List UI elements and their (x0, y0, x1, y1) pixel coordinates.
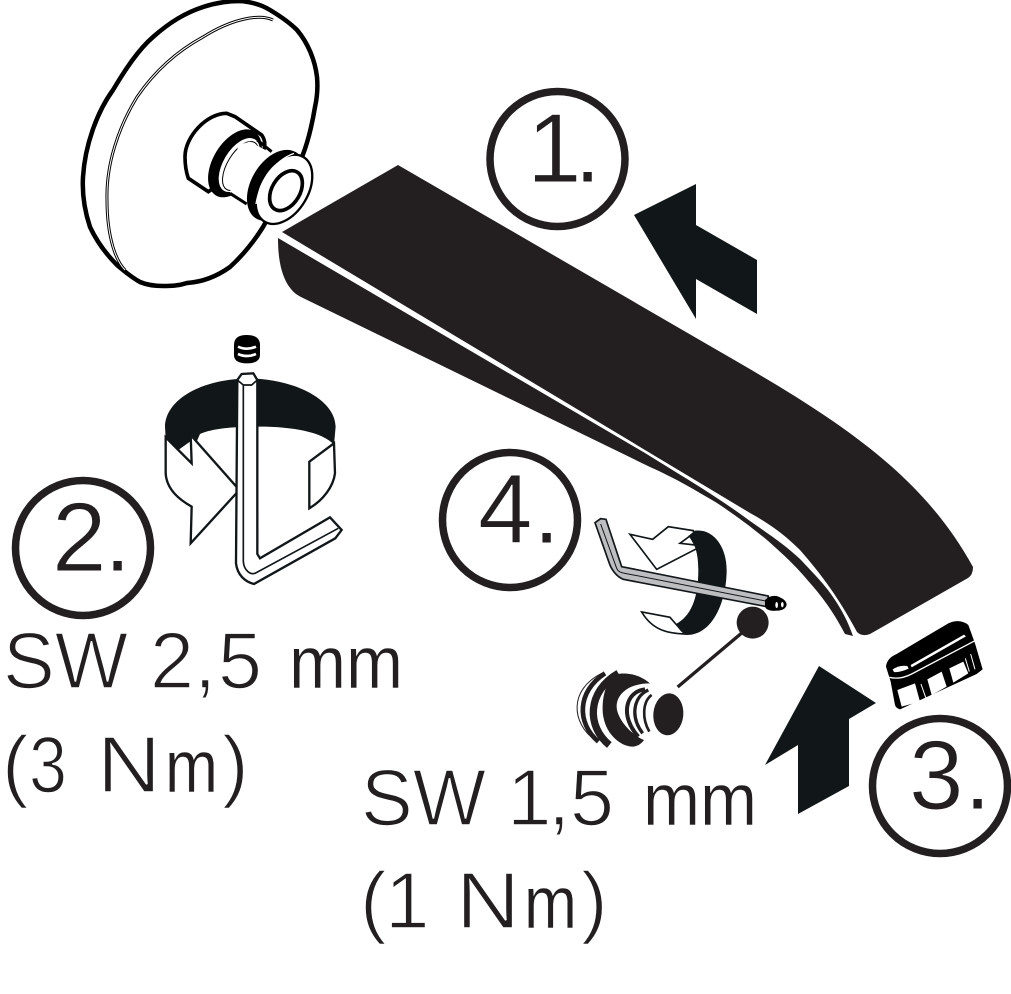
connector fitting (185, 113, 324, 234)
wall mount disc with connector (83, 1, 324, 286)
step 1 number: . (574, 93, 601, 203)
label SW 2,5 mm: mm (289, 621, 403, 704)
step 2 number: . (104, 482, 131, 592)
spout lower face (278, 238, 853, 636)
step 4 number: . (533, 454, 560, 564)
label SW 1,5 mm: 1 (507, 753, 552, 842)
label 1 Nm: 1 (385, 856, 430, 945)
label 3 Nm: ) (222, 720, 249, 809)
label SW 1,5 mm: , (548, 753, 570, 842)
screw on key tip (765, 596, 787, 611)
step 3 number (872, 718, 1008, 854)
label SW 1,5 mm: 5 (570, 753, 614, 842)
label 3 Nm: m (165, 725, 218, 808)
hex key (236, 373, 342, 584)
hex key 2.5 mm with rotation arrow (165, 335, 342, 584)
label SW 1,5 mm: mm (643, 758, 757, 841)
step 2 number: 2 (52, 482, 107, 592)
label 3 Nm: N (97, 720, 161, 809)
label SW 2,5 mm: SW (3, 616, 128, 705)
step 3 number: . (964, 720, 991, 830)
label SW 2,5 mm: 5 (218, 616, 262, 705)
threaded insert (577, 673, 685, 747)
hex key 1.5 mm detail (577, 519, 787, 747)
arrow 1 (634, 184, 757, 319)
label SW 1,5 mm: SW (361, 753, 486, 842)
step 4 number (442, 452, 578, 588)
label SW 2,5 mm: 2 (150, 616, 194, 705)
rotation ribbon (165, 378, 336, 543)
rotation ribbon (630, 527, 727, 635)
disc outline (83, 1, 317, 286)
leader line and dot (678, 607, 769, 687)
grub screw (234, 335, 260, 363)
arrow 3 (765, 666, 876, 814)
label 1 Nm: ( (360, 856, 387, 945)
label 1 Nm: N (456, 856, 520, 945)
label 3 Nm: 3 (29, 720, 67, 809)
step 1 number (490, 92, 625, 226)
spout (278, 165, 973, 636)
step 3 number: 3 (909, 720, 964, 830)
label 1 Nm: ) (581, 856, 608, 945)
label 1 Nm: m (524, 861, 577, 944)
disc inner rim line (107, 17, 273, 270)
step 1 number: 1 (527, 93, 582, 203)
aerator (886, 621, 983, 709)
step 2 number (16, 480, 150, 616)
label SW 2,5 mm: , (194, 616, 216, 705)
step 4 number: 4 (478, 454, 533, 564)
spout top face (282, 165, 973, 635)
label 3 Nm: ( (2, 720, 29, 809)
hex key (595, 519, 768, 607)
